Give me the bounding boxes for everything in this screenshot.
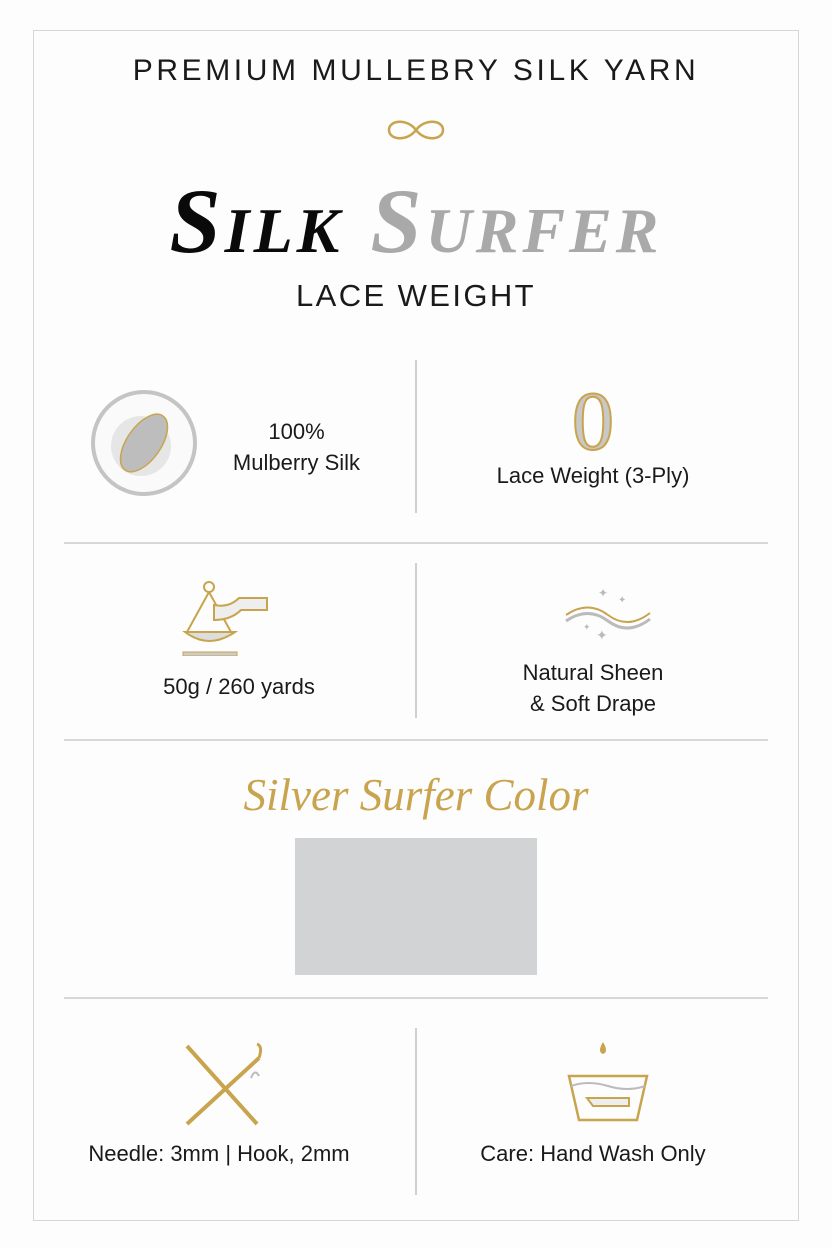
icon: infinity ornament	[388, 120, 444, 140]
panel: needles	[88, 1042, 350, 1166]
icon: crossed needle and hook	[186, 1042, 262, 1126]
icon: waves with sparkles: ✦	[618, 595, 626, 606]
title: silk surfer: Silk Surfer	[170, 170, 662, 272]
text: natural sheen & soft drape: Natural Sheen	[523, 660, 663, 685]
icon: waves with sparkles: ✦	[598, 586, 608, 600]
heading: premium mulberry silk yarn: PREMIUM MULLEBRY SILK YARN	[133, 54, 699, 87]
subtitle: lace weight: LACE WEIGHT	[296, 278, 536, 313]
text: 100% mulberry silk	[233, 419, 360, 475]
icon: hand wash basin	[568, 1042, 648, 1122]
panel: yardage	[163, 581, 315, 699]
dividers	[64, 542, 768, 544]
text: 50g / 260 yards: 50g / 260 yards	[163, 674, 315, 699]
color swatch	[295, 838, 537, 975]
panel: sheen	[523, 586, 663, 716]
text: 100% mulberry silk: Mulberry Silk	[233, 450, 360, 475]
icon: waves with sparkles: ✦	[583, 622, 591, 632]
text: care hand wash only: Care: Hand Wash Only	[480, 1141, 706, 1166]
icon: scale and tape	[182, 581, 268, 656]
panel: fiber	[91, 390, 360, 496]
text: natural sheen & soft drape: & Soft Drape	[530, 691, 656, 716]
text: 100% mulberry silk: 100%	[268, 419, 325, 444]
text: needle and hook: Needle: 3mm | Hook, 2mm	[88, 1141, 350, 1166]
panel: weight	[497, 375, 689, 488]
icon: waves with sparkles: ✦	[596, 627, 608, 643]
text: natural sheen & soft drape	[523, 660, 663, 716]
panel: care	[480, 1042, 706, 1166]
icon: waves with sparkles	[565, 586, 651, 643]
text: lace weight 3-ply: Lace Weight (3-Ply)	[497, 463, 689, 488]
heading: silver surfer color: Silver Surfer Color	[244, 770, 588, 820]
icon: silk cocoon	[91, 390, 197, 496]
icon: zero: 0	[572, 375, 614, 468]
